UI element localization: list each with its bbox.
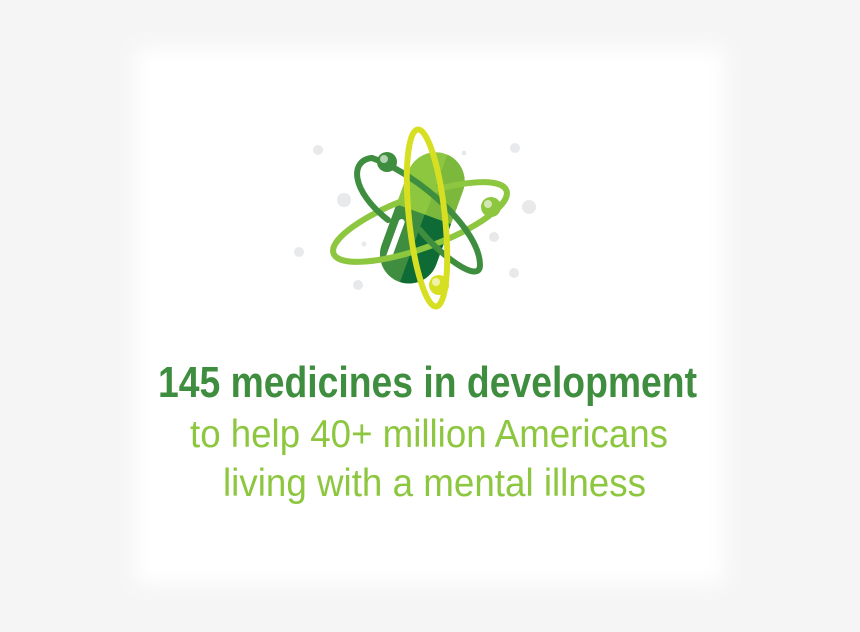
- icon: atom pill: [294, 128, 536, 308]
- text block: subtitle: to help 40+ million Americans: [190, 413, 668, 456]
- panel: card background: [135, 48, 725, 584]
- orbit: light green: [325, 166, 515, 278]
- pill: [372, 144, 473, 292]
- electrons: [377, 152, 397, 172]
- orbit: dark green: [372, 158, 480, 272]
- text block: subtitle: living with a mental illness: [223, 462, 646, 505]
- decorative dots: [294, 143, 536, 290]
- text block: subtitle: [190, 413, 668, 505]
- orbit: yellow: [400, 128, 454, 308]
- heading: 145 medicines in development: [158, 358, 697, 407]
